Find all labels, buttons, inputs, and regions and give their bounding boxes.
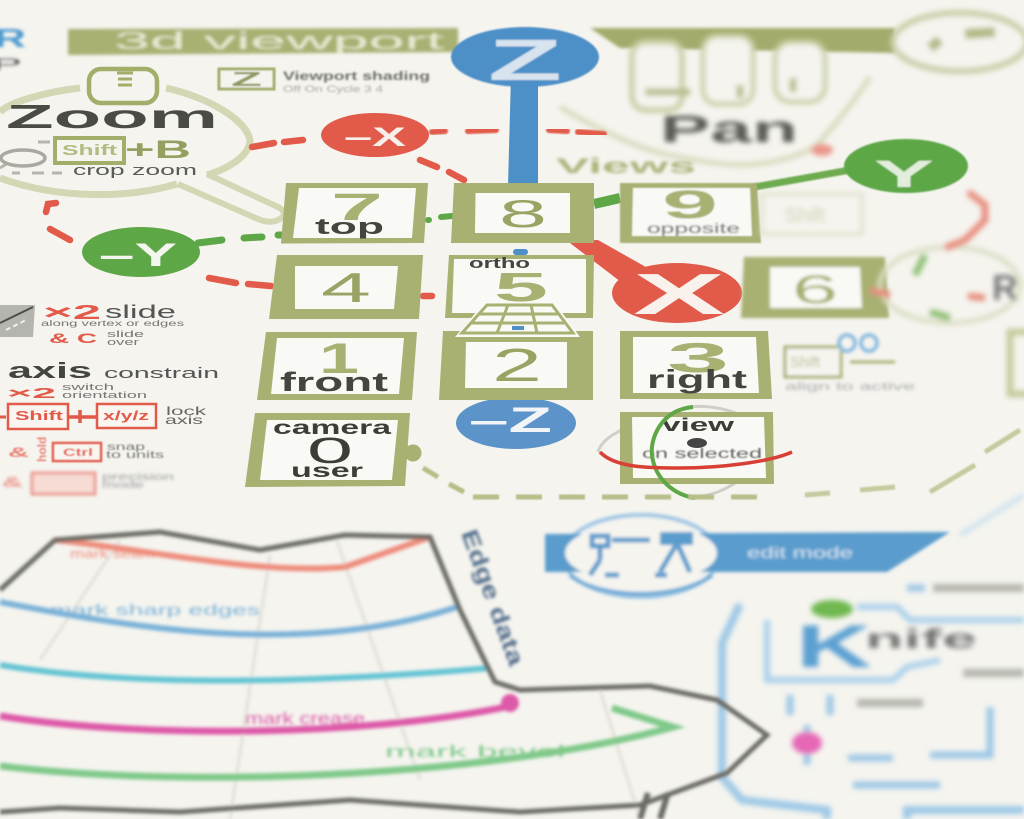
shift label: Shift	[790, 354, 821, 371]
diagonal dashes	[423, 468, 464, 492]
key face	[452, 259, 586, 313]
magnifier ring	[0, 88, 250, 195]
key: 2	[439, 331, 593, 400]
digit: 8	[499, 193, 547, 236]
key: 7 top	[281, 183, 428, 244]
z axis stem	[508, 75, 538, 186]
green label: mark bevel	[385, 742, 565, 761]
heading: 3d viewport: 3d viewport	[114, 28, 445, 55]
hint text: align to active	[785, 381, 915, 393]
circle	[451, 27, 599, 87]
label: –Z	[469, 401, 552, 440]
hold: hold	[35, 437, 49, 462]
lock axis 2: axis	[165, 413, 203, 427]
nife: nife	[865, 623, 977, 654]
label: Z	[488, 28, 562, 93]
panel: slide	[0, 302, 184, 347]
key face	[465, 342, 567, 388]
label: pan: Pan	[660, 109, 798, 151]
bar	[545, 532, 950, 572]
digit: 9	[662, 183, 718, 227]
far right key	[1010, 332, 1024, 394]
camera label: camera	[273, 418, 392, 439]
circle	[612, 263, 742, 323]
circle	[844, 139, 968, 193]
green dashes	[915, 255, 950, 318]
key frame	[620, 412, 774, 484]
circle	[321, 113, 429, 157]
axis: -X circle	[321, 113, 429, 157]
grey text strips	[857, 588, 1024, 703]
chart: edge loop model	[0, 532, 767, 819]
axis: X circle	[612, 262, 742, 327]
-y red dashes	[46, 203, 432, 296]
label: view: view	[662, 415, 736, 435]
top right blue lines	[960, 495, 1024, 535]
key frame	[281, 183, 428, 244]
green orbit	[652, 407, 695, 498]
orientation: orientation	[62, 390, 147, 400]
knife outer outline	[722, 604, 1024, 819]
Z letter: Z	[231, 69, 262, 91]
panel: right side fragment	[870, 192, 1024, 394]
red dot	[811, 144, 833, 156]
plus	[68, 410, 97, 423]
ring marks	[930, 32, 995, 48]
wheel dashes	[117, 73, 133, 85]
mouse button left	[632, 42, 682, 110]
user label: user	[291, 461, 364, 482]
grid lines	[471, 305, 566, 333]
key: 9 opposite	[620, 183, 761, 243]
switch: switch	[62, 382, 114, 392]
key: view on selected	[598, 406, 792, 498]
and: &	[2, 474, 23, 491]
mouse button right	[775, 42, 825, 102]
cyan loop	[0, 665, 490, 680]
digit: 1	[319, 335, 359, 383]
key frame	[257, 332, 417, 400]
green link from 7 to 8	[428, 216, 452, 220]
red dashes	[870, 192, 985, 298]
key frame	[620, 331, 772, 399]
outer ring	[563, 515, 719, 597]
key frame	[620, 183, 761, 243]
label: –Y	[99, 237, 177, 273]
label: Y	[874, 154, 934, 196]
blue icon	[839, 335, 855, 351]
label: opposite	[647, 220, 740, 236]
hint key	[762, 194, 862, 234]
plus B: +B	[125, 136, 191, 164]
and C: & C	[49, 330, 97, 346]
to units: to units	[106, 450, 164, 461]
icon: perspective grid	[455, 303, 580, 337]
panel: knife	[722, 495, 1024, 819]
icon: right end ring	[893, 13, 1024, 71]
key face	[633, 337, 759, 393]
camera dashed link	[423, 430, 1020, 497]
panel: align hint right of 3	[785, 335, 915, 393]
panel: snap	[8, 437, 164, 462]
label: –X	[344, 122, 406, 152]
tools: mode	[102, 480, 145, 491]
key xyz	[97, 404, 156, 428]
slide label: slide	[105, 302, 176, 322]
label: front	[280, 367, 388, 397]
lower ring	[570, 575, 712, 594]
loop labels: mark seam	[70, 546, 155, 561]
icon: nodes	[590, 536, 690, 575]
key: Z	[219, 69, 274, 89]
key: 6	[741, 257, 889, 318]
blue dots between 8 and 5	[516, 249, 525, 255]
key face	[271, 338, 404, 394]
x2: ×2	[7, 385, 56, 402]
xyz text: x/y/z	[103, 408, 150, 423]
axis connector lines	[46, 75, 850, 296]
key frame	[439, 331, 593, 400]
axis: Z circle	[451, 27, 599, 93]
precision: precision	[102, 472, 174, 483]
key face	[260, 420, 398, 480]
key ctrl	[53, 443, 101, 461]
and: &	[8, 444, 29, 460]
label: viewport shading: Viewport shading	[283, 69, 430, 83]
label: X	[633, 262, 726, 327]
x2 label: ×2	[43, 302, 101, 324]
-y green dashes	[198, 235, 283, 243]
panel: 3d viewport header	[68, 28, 895, 55]
key frame	[451, 183, 594, 243]
plus	[850, 360, 895, 364]
key	[32, 473, 95, 494]
key face	[295, 266, 398, 309]
key face	[632, 188, 752, 236]
panel: axis constrain	[0, 358, 219, 429]
sub label: Off On Cycle 3 4	[283, 84, 383, 94]
icon: mouse wheel	[89, 69, 157, 103]
halo	[455, 303, 580, 337]
heading: zoom: Zoom	[6, 98, 218, 135]
letter: R	[992, 267, 1018, 308]
button dots	[645, 78, 793, 98]
circle	[565, 523, 717, 583]
crop circle	[1, 150, 45, 166]
key face	[770, 267, 862, 308]
sub lines	[790, 588, 990, 785]
digit: 4	[321, 264, 371, 311]
key frame	[741, 257, 889, 318]
shift text: Shift	[15, 408, 64, 423]
rising dashes	[805, 430, 1020, 495]
key: 3 right	[620, 331, 772, 399]
green loop	[0, 708, 673, 777]
axis: Y circle	[844, 139, 968, 196]
shift label: Shift	[62, 142, 117, 159]
mouse button mid	[703, 36, 753, 104]
knife inner outline	[767, 607, 1024, 680]
key: 1 front	[257, 332, 417, 400]
y axis green line to 9	[594, 198, 620, 204]
heading axis: axis	[8, 358, 92, 383]
ctrl text: Ctrl	[63, 447, 93, 459]
grid body	[462, 305, 573, 333]
mesh faint lines	[40, 535, 640, 819]
pink loop	[0, 705, 515, 731]
digit: 3	[667, 334, 729, 381]
panel: pan	[560, 13, 1024, 165]
label: ortho	[469, 255, 530, 272]
label: on selected: on selected	[642, 445, 762, 461]
panel: faded hint right of 9	[762, 194, 862, 234]
key face	[475, 193, 570, 233]
link dot	[404, 444, 422, 462]
orbit outline	[880, 247, 1020, 323]
blue label: mark sharp edges	[50, 602, 260, 619]
icon: crop marks	[0, 142, 62, 173]
icon line	[0, 307, 33, 323]
lock axis: lock	[166, 404, 208, 418]
key frame	[445, 255, 594, 318]
panel: blue heading with icon	[545, 515, 950, 597]
key face	[293, 188, 416, 238]
mesh outline	[0, 532, 767, 812]
green tag	[811, 600, 853, 618]
over label 2: over	[107, 337, 139, 347]
snap: snap	[107, 442, 146, 453]
circle	[82, 227, 200, 277]
header bar	[68, 28, 458, 55]
key: 5 ortho	[445, 255, 594, 318]
shift key	[785, 347, 841, 377]
label: right	[647, 364, 748, 394]
magnifier handle	[178, 174, 284, 222]
key: 0 camera user	[245, 413, 422, 487]
top left corner fragment	[0, 23, 26, 74]
label: views: Views	[556, 155, 696, 178]
label: top	[315, 214, 384, 239]
header bar right	[590, 28, 895, 53]
bottom hatch	[640, 793, 668, 819]
icon block	[660, 532, 693, 545]
grey orbit	[598, 406, 740, 497]
key face	[632, 417, 766, 478]
panel: viewport shading	[219, 69, 430, 94]
axis: -Y circle	[82, 227, 200, 277]
digit: 2	[492, 339, 542, 391]
edge data label: Edge data	[456, 526, 530, 669]
-x red dashes	[252, 140, 464, 180]
pink node	[501, 694, 519, 712]
-x red dashes far	[432, 130, 604, 134]
constrain: constrain	[104, 365, 219, 382]
icon: slide tile	[0, 305, 35, 337]
horizontal dashes	[473, 494, 760, 500]
digit: 0	[307, 430, 353, 471]
bar text: edit mode	[747, 545, 853, 562]
slide sub: along vertex or edges	[41, 319, 184, 328]
icon dashes	[6, 320, 26, 330]
pink label: mark crease	[245, 709, 365, 728]
key frame	[245, 413, 410, 487]
key shift	[8, 404, 68, 429]
pink dot	[792, 732, 822, 754]
digit: 5	[494, 264, 548, 310]
x axis red line	[566, 240, 660, 285]
over label: slide	[107, 329, 144, 339]
blue icon 2	[861, 335, 877, 351]
key: 8	[451, 183, 594, 243]
hand outline	[560, 77, 870, 165]
left stub	[0, 416, 6, 418]
blue loop	[0, 602, 460, 635]
digit: 7	[331, 187, 383, 229]
red loop	[55, 537, 430, 569]
red orbit	[600, 452, 792, 468]
axis: -Z circle	[456, 397, 576, 449]
key: 4	[269, 255, 423, 319]
key: shift	[55, 138, 124, 163]
key frame	[269, 255, 423, 319]
panel: zoom	[0, 69, 284, 222]
green line from 9 to Y	[755, 170, 850, 187]
centre dot	[687, 438, 707, 448]
panel: precision	[2, 472, 174, 494]
hint text: Shift	[785, 205, 825, 227]
label: crop zoom: crop zoom	[73, 162, 197, 179]
circle	[456, 397, 576, 449]
K: K	[796, 613, 872, 680]
blue dot	[512, 326, 524, 330]
digit: 6	[792, 268, 838, 312]
